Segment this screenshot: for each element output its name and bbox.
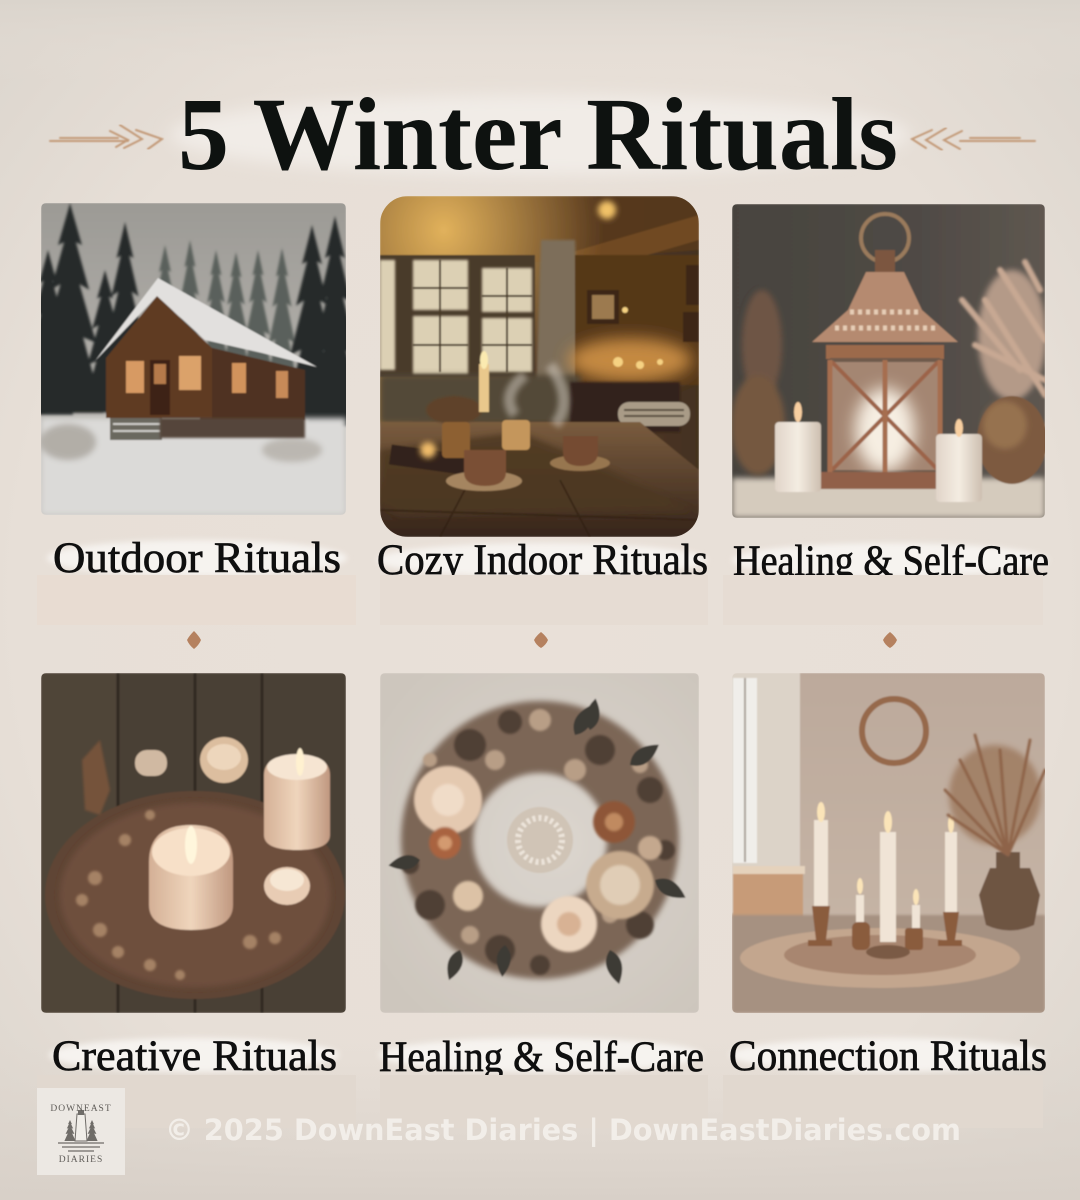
- blank caption patches top row: [37, 575, 1043, 625]
- label: creative rituals: Creative Rituals: [52, 1033, 337, 1080]
- title: 5 Winter Rituals: [178, 77, 898, 192]
- icon: right arrow ornament: [912, 128, 1035, 150]
- panel: creative rituals candles on wood photo: [41, 673, 346, 1013]
- panel: outdoor rituals winter cabin photo: [41, 203, 346, 515]
- label: healing and self-care top: Healing & Self-Care: [733, 538, 1049, 585]
- panel: healing and self-care wreath photo: [380, 673, 699, 1013]
- blank caption patches bottom row: [37, 1075, 1043, 1128]
- lighthouse and pines: [58, 1110, 104, 1151]
- label: connection rituals: Connection Rituals: [729, 1033, 1047, 1080]
- logo: DownEast Diaries badge: DOWNEAST: [50, 1104, 112, 1114]
- panel: cozy indoor rituals warm room photo: [380, 196, 699, 537]
- logo: DownEast Diaries badge: DIARIES: [59, 1155, 103, 1165]
- panel: healing and self-care lantern photo: [731, 204, 1047, 518]
- panel: connection rituals candles and vase photo: [732, 673, 1045, 1013]
- label: outdoor rituals: Outdoor Rituals: [53, 535, 341, 582]
- label: cozy indoor rituals: Cozy Indoor Rituals: [377, 537, 708, 584]
- icon: left arrow ornament: [50, 125, 162, 149]
- footer copyright text: © 2025 DownEast Diaries | DownEastDiaries.com: [165, 1113, 961, 1147]
- label: healing and self-care bottom: Healing & Self-Care: [379, 1034, 704, 1081]
- icon: small diamond markers: [187, 631, 897, 649]
- logo: DownEast Diaries badge: [37, 1088, 125, 1175]
